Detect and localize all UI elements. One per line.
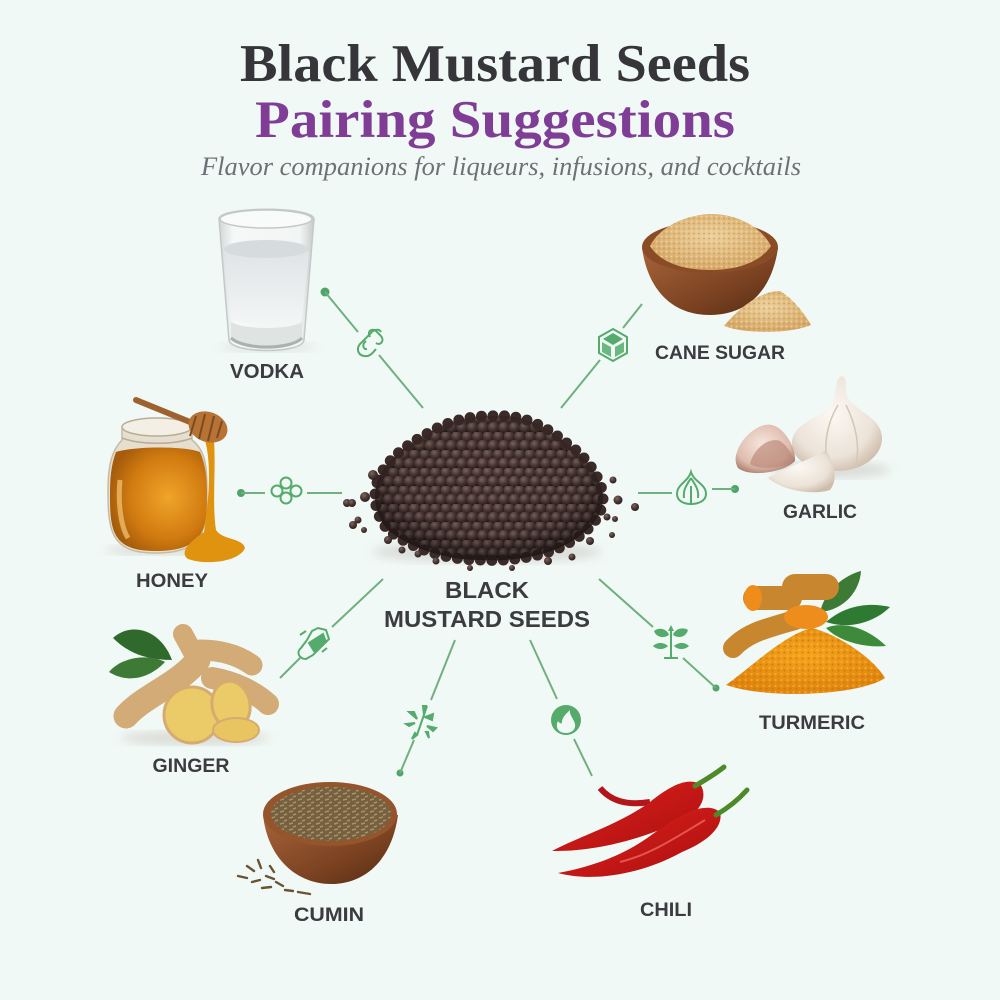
title: Pairing Suggestions <box>255 91 735 149</box>
connector: chili <box>530 640 592 776</box>
connector: ginger <box>280 579 383 678</box>
center label <box>384 577 590 632</box>
connector: cane sugar <box>561 304 642 408</box>
center label: MUSTARD SEEDS <box>384 606 590 632</box>
label: cane sugar: CANE SUGAR <box>655 343 785 364</box>
loose seeds <box>343 470 639 571</box>
icon: cumin sprig <box>406 706 436 739</box>
label: honey: HONEY <box>136 571 208 592</box>
connector: cumin <box>396 640 455 776</box>
icon: honey drops <box>272 478 302 504</box>
label: chili: CHILI <box>640 900 692 921</box>
label: turmeric: TURMERIC <box>759 713 865 734</box>
central seed pile <box>343 416 639 571</box>
title <box>240 35 750 149</box>
icon: ginger root <box>299 628 329 659</box>
loose cumin seeds <box>238 860 310 894</box>
item: cane sugar bowl <box>642 214 811 332</box>
label: ginger: GINGER <box>152 756 230 777</box>
subtitle: Flavor companions for liqueurs, infusions, and cocktails <box>200 152 801 181</box>
mound shading <box>375 416 603 560</box>
label: vodka: VODKA <box>230 361 304 383</box>
icon: chain link <box>358 330 382 356</box>
item: garlic <box>736 376 890 492</box>
item: turmeric <box>726 571 890 694</box>
connector: honey <box>237 478 342 504</box>
honey fill <box>110 448 207 551</box>
icon: sugar cube <box>599 329 627 361</box>
item: cumin bowl <box>238 782 398 894</box>
connector: garlic <box>638 472 739 504</box>
honey drip and pool <box>185 440 245 562</box>
label: garlic: GARLIC <box>783 502 857 523</box>
item: ginger <box>109 629 270 745</box>
center label: BLACK <box>445 577 529 603</box>
connector: vodka <box>320 288 423 408</box>
title: Black Mustard Seeds <box>240 35 750 93</box>
label: cumin: CUMIN <box>294 905 364 926</box>
item: honey jar <box>105 400 245 562</box>
connector: turmeric <box>599 579 720 692</box>
seed mound <box>375 416 603 560</box>
icon: garlic <box>677 472 706 504</box>
icon: turmeric plant <box>653 625 689 658</box>
item: vodka glass <box>219 209 316 352</box>
jar glass <box>108 420 207 553</box>
item: chili peppers <box>552 767 747 877</box>
icon: flame <box>551 705 581 735</box>
